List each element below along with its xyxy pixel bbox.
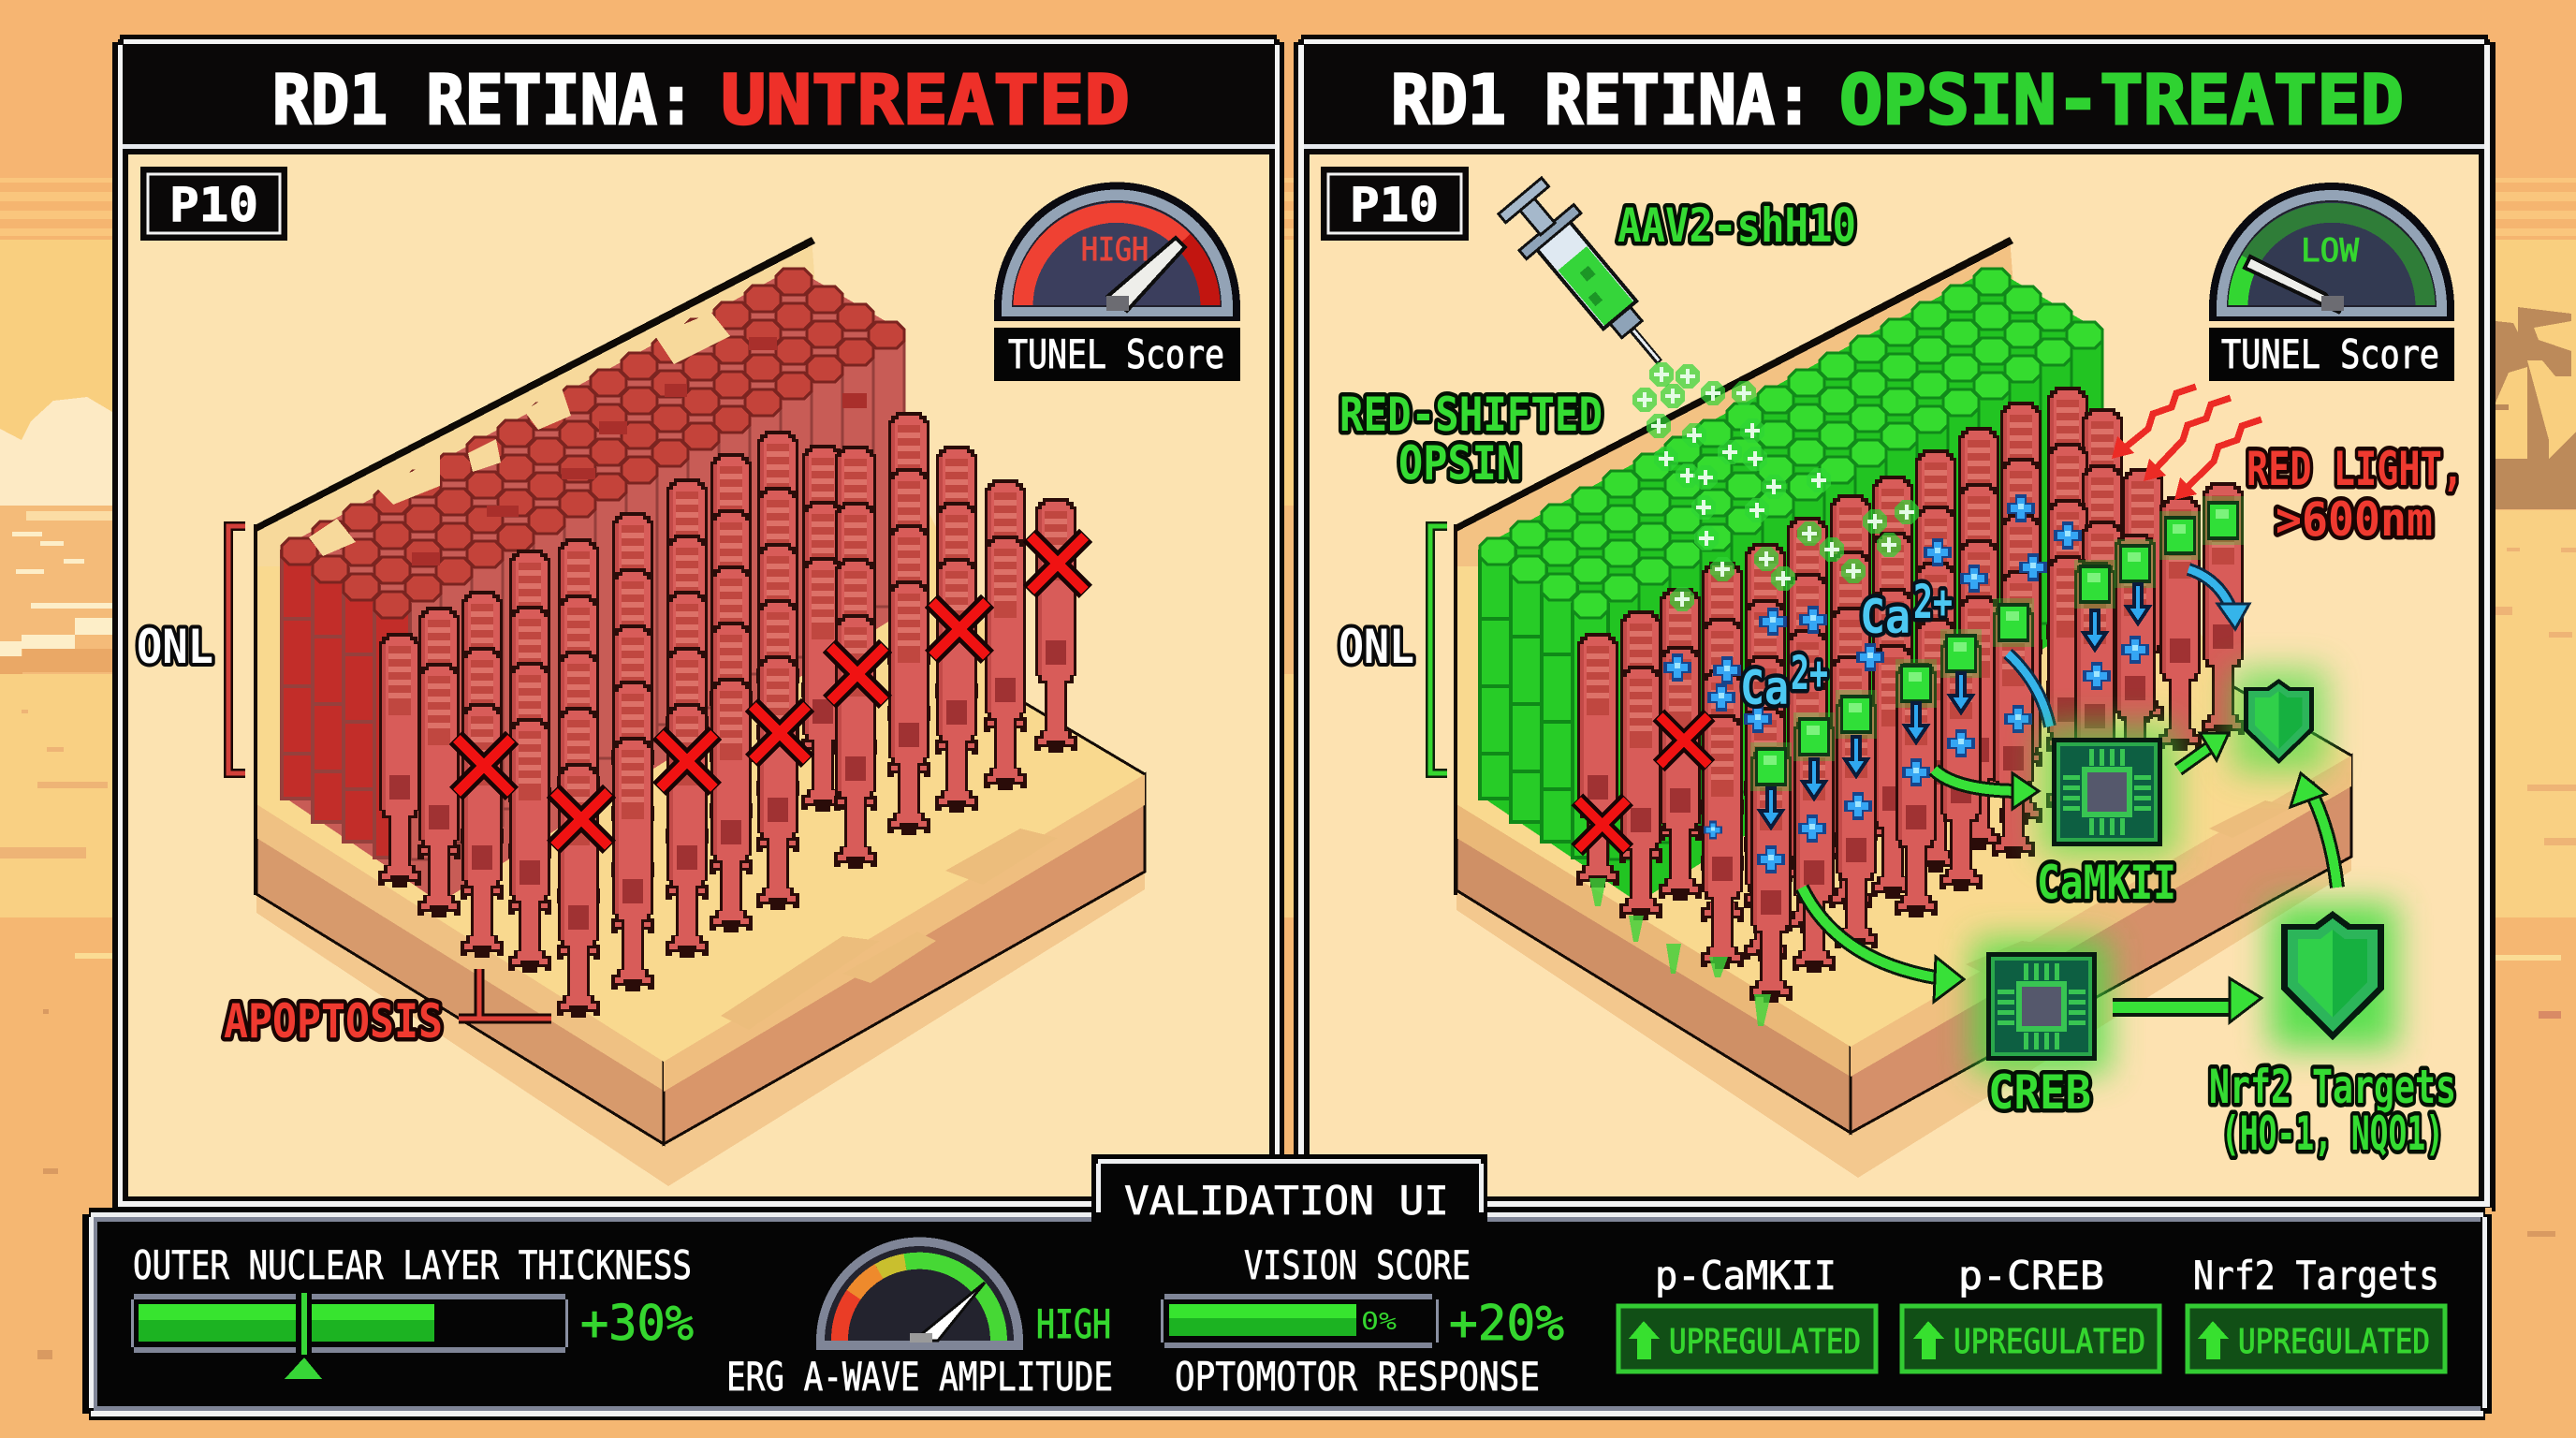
label: red-shifted opsin: OPSIN <box>1398 436 1521 491</box>
status: p-CaMKII upregulated: p-CaMKII <box>1655 1253 1837 1299</box>
gauge: TUNEL score high: TUNEL Score <box>1008 331 1224 377</box>
metric: ERG a-wave gauge <box>726 1238 1113 1400</box>
blue curved arrows <box>2008 569 2249 726</box>
ONL bracket <box>228 526 245 773</box>
green opsin cell caps <box>1750 496 2244 791</box>
metric: vision score optomotor response: VISION SCORE <box>1244 1242 1471 1288</box>
status: Nrf2 targets upregulated: UPREGULATED <box>2238 1323 2430 1361</box>
arrow: CaMKII to small shield <box>2178 733 2229 770</box>
panel: validation UI <box>82 1154 2492 1420</box>
arrow: cell to CaMKII <box>1934 770 2039 809</box>
wall damage patches <box>309 313 730 556</box>
ONL label: ONL <box>137 620 213 674</box>
label: Nrf2 targets: Nrf2 Targets <box>2209 1060 2456 1114</box>
photoreceptor cells <box>378 412 1077 1018</box>
arrow: cell to CREB <box>1802 888 1964 1002</box>
arrow: CREB to Nrf2 shield <box>2113 978 2261 1022</box>
metric: ERG a-wave gauge: ERG A-WAVE AMPLITUDE <box>726 1354 1113 1400</box>
calcium label 1 <box>1860 575 1953 644</box>
block right face <box>1851 756 2351 1133</box>
status: Nrf2 targets upregulated <box>2188 1253 2445 1372</box>
gauge: TUNEL score low: TUNEL Score <box>2221 331 2439 377</box>
green vector particles <box>1632 362 1919 611</box>
label: red-shifted opsin: RED-SHIFTED <box>1339 388 1603 442</box>
label: Nrf2 targets <box>2209 1060 2456 1161</box>
label: apoptosis: APOPTOSIS <box>224 994 443 1049</box>
status: p-CaMKII upregulated <box>1618 1253 1876 1372</box>
gauge: TUNEL score low: LOW <box>2301 232 2360 270</box>
panel: untreated retina <box>112 35 1284 1211</box>
status: p-CaMKII upregulated: UPREGULATED <box>1669 1323 1861 1361</box>
ONL label: ONL <box>1339 620 1414 674</box>
timepoint badge P10 <box>1321 167 1469 241</box>
heading: untreated <box>272 61 1130 140</box>
calcium label 2: 2+ <box>1791 646 1828 700</box>
calcium label 1: 2+ <box>1913 575 1953 629</box>
gauge: TUNEL score high: HIGH <box>1081 231 1149 269</box>
status: p-CREB upregulated <box>1902 1253 2159 1372</box>
photoreceptor cells <box>1576 387 2245 1003</box>
block shadow <box>1456 857 2351 1178</box>
status: p-CREB upregulated: UPREGULATED <box>1954 1323 2145 1361</box>
heading: untreated: UNTREATED <box>721 61 1130 140</box>
apoptosis inhibition bar <box>459 969 551 1019</box>
heading: opsin-treated: OPSIN-TREATED <box>1839 61 2404 140</box>
chip: CREB with glow <box>1973 939 2109 1075</box>
ONL bracket <box>1430 526 1447 773</box>
block right face <box>664 774 1145 1144</box>
block shadow <box>256 872 1145 1186</box>
heading: opsin-treated <box>1391 61 2404 140</box>
icon: syringe with AAV <box>1493 173 1687 385</box>
metric: outer nuclear layer thickness: OUTER NUCLEAR LAYER THICKNESS <box>133 1242 692 1288</box>
metric: vision score optomotor response: +20% <box>1449 1296 1564 1352</box>
tab: validation UI title <box>1091 1154 1487 1224</box>
metric: outer nuclear layer thickness <box>131 1242 694 1379</box>
free calcium ions <box>1663 494 2082 840</box>
metric: vision score optomotor response: OPTOMOTOR RESPONSE <box>1175 1354 1540 1400</box>
icon: Nrf2 shield <box>2270 903 2396 1049</box>
green foot glow drips <box>1589 878 1771 1026</box>
heading: opsin-treated: RD1 RETINA: <box>1391 61 1813 140</box>
tab: validation UI title: VALIDATION UI <box>1124 1178 1449 1224</box>
block left face <box>256 804 664 1144</box>
back wall rim <box>256 237 815 566</box>
calcium label 2 <box>1740 646 1828 715</box>
timepoint badge P10: P10 <box>169 178 258 232</box>
gauge: TUNEL score high <box>994 182 1240 381</box>
calcium label 1: Ca <box>1860 590 1910 644</box>
label: CaMKII: CaMKII <box>2037 856 2176 910</box>
label: red light: RED LIGHT, <box>2247 442 2464 496</box>
label: AAV2-shH10: AAV2-shH10 <box>1617 198 1856 253</box>
chip: CaMKII with glow <box>2041 726 2176 857</box>
degenerating cone mass <box>282 268 904 902</box>
red X marks: dying cells <box>456 536 1086 847</box>
metric: vision score optomotor response: 0% <box>1361 1308 1397 1336</box>
label: red light <box>2247 442 2464 547</box>
block floor <box>1456 281 2351 1047</box>
gauge: TUNEL score low <box>2209 183 2454 381</box>
opsin-expressing cone mass <box>1480 268 2102 902</box>
metric: ERG a-wave gauge: HIGH <box>1036 1301 1111 1347</box>
arrow: Nrf2 shield to small shield <box>2291 773 2337 888</box>
icon: small shield <box>2232 669 2326 772</box>
label: CREB: CREB <box>1988 1065 2091 1120</box>
retina tissue block untreated <box>254 237 1145 1186</box>
label: Nrf2 targets: (HO-1, NQO1) <box>2221 1107 2444 1161</box>
timepoint badge P10 <box>140 167 287 241</box>
panel: opsin-treated retina <box>1294 35 2496 1211</box>
metric: outer nuclear layer thickness: +30% <box>580 1296 694 1352</box>
back wall rim <box>1456 237 2013 566</box>
calcium label 2: Ca <box>1740 661 1789 715</box>
red X marks: remaining dying cells <box>1577 715 1709 850</box>
tissue mottling <box>412 337 867 565</box>
metric: vision score optomotor response <box>1161 1242 1564 1400</box>
calcium down arrows and ions in cells <box>1757 584 2149 873</box>
block left face <box>1456 804 1851 1133</box>
heading: untreated: RD1 RETINA: <box>272 61 695 140</box>
retina tissue block treated <box>1454 237 2351 1178</box>
block floor <box>256 281 1145 1062</box>
status: Nrf2 targets upregulated: Nrf2 Targets <box>2193 1253 2439 1299</box>
status: p-CREB upregulated: p-CREB <box>1958 1253 2104 1299</box>
red light arrows <box>2112 387 2261 500</box>
timepoint badge P10: P10 <box>1350 178 1439 232</box>
label: red light: >600nm <box>2276 492 2433 547</box>
label: red-shifted opsin <box>1339 388 1603 491</box>
